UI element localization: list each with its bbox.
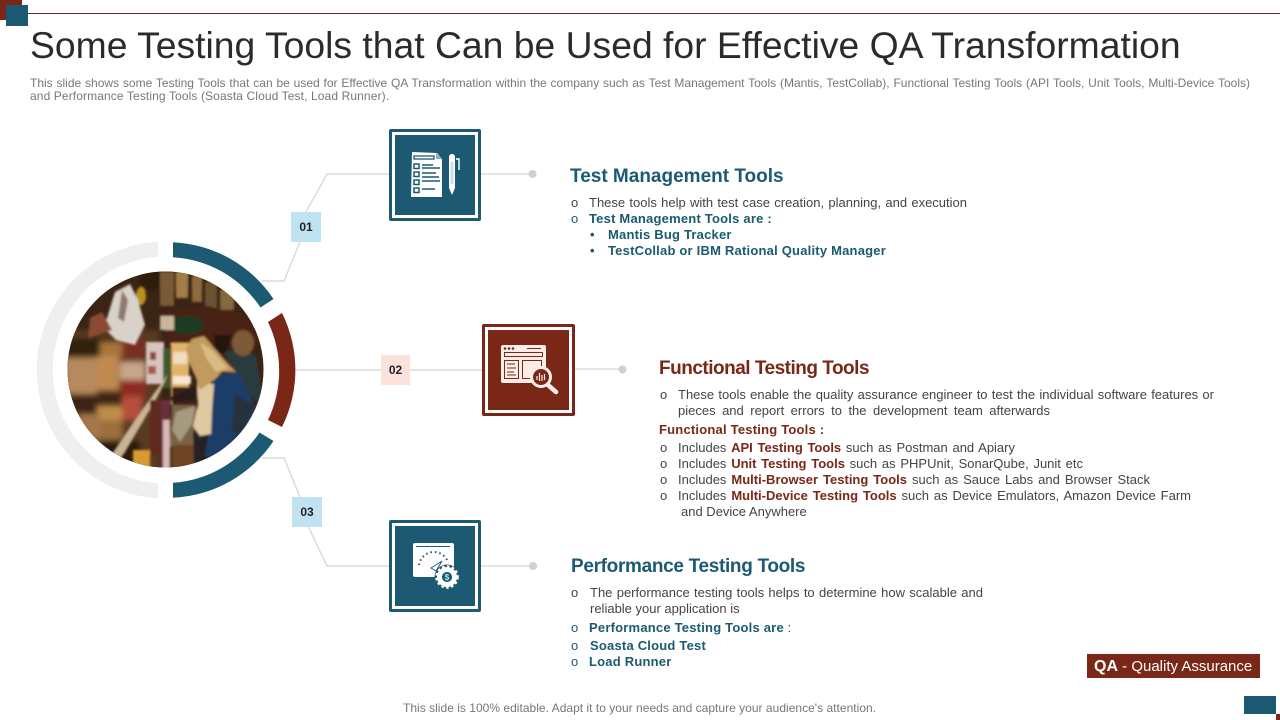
text block: Includes Multi-Device Testing Tools such as Device Emulators, Amazon Device Farm xyxy=(678,488,1191,502)
heading: Functional Testing Tools xyxy=(659,358,869,379)
ring segment: red xyxy=(268,313,295,427)
text block: Load Runner xyxy=(589,654,671,668)
icon box: test management xyxy=(389,129,481,221)
blouse xyxy=(193,380,214,436)
badge 03: 03 xyxy=(300,505,314,519)
text block: pieces and report errors to the development team afterwards xyxy=(678,402,1050,418)
icon box: performance testing xyxy=(389,520,481,612)
text block: and Device Anywhere xyxy=(681,504,807,518)
subtitle description xyxy=(30,76,1250,103)
section: functional testing tools xyxy=(659,358,1214,518)
jacket xyxy=(205,372,256,462)
ring segment: grey xyxy=(37,242,158,498)
shelf edge xyxy=(112,374,168,458)
text block: Test Management Tools are : xyxy=(589,210,772,226)
merchandise column xyxy=(146,342,164,384)
badge 03 xyxy=(292,497,322,527)
text block: o xyxy=(660,488,667,502)
text block: o xyxy=(660,440,667,454)
text block: These tools help with test case creation, planning, and execution xyxy=(589,194,967,210)
top corner accent xyxy=(0,0,28,26)
bottom corner accent xyxy=(1244,696,1280,720)
abbreviation callout xyxy=(1087,654,1260,678)
segmented ring and photo xyxy=(36,242,296,498)
text block: o xyxy=(571,654,578,668)
heading: Performance Testing Tools xyxy=(571,556,805,577)
subtitle description: and Performance Testing Tools (Soasta Cloud Test, Load Runner). xyxy=(30,89,389,103)
text block: o xyxy=(571,584,578,600)
icon box: performance testing: $ xyxy=(445,573,450,582)
text block xyxy=(571,194,967,258)
person behind xyxy=(224,349,262,402)
text block: o xyxy=(571,210,578,226)
text block: The performance testing tools helps to determine how scalable and xyxy=(590,584,983,600)
text block: Functional Testing Tools : xyxy=(659,422,824,436)
pants xyxy=(192,430,209,464)
text block: o xyxy=(571,620,578,634)
text block: o xyxy=(571,638,578,652)
hair xyxy=(186,336,236,390)
icon box: functional testing xyxy=(482,324,575,416)
text block: Performance Testing Tools are : xyxy=(589,620,791,634)
lit doorway xyxy=(171,343,189,405)
heading: Test Management Tools xyxy=(570,166,784,187)
text block: These tools enable the quality assurance engineer to test the individual software features or xyxy=(678,386,1214,402)
text block: o xyxy=(660,456,667,470)
text block: Soasta Cloud Test xyxy=(590,638,706,652)
section: performance testing tools xyxy=(571,556,983,668)
ring segment: bottom teal xyxy=(173,432,274,498)
abbreviation callout: QA - Quality Assurance xyxy=(1094,658,1252,675)
subtitle description: This slide shows some Testing Tools that can be used for Effective QA Transformation within the company such as Test Management Tools (Mantis, TestCollab), Functional Testing Tools (API Tools, Unit Tools, Multi-Device Tools) xyxy=(30,76,1250,90)
top hanging goods xyxy=(138,272,224,291)
badge 02: 02 xyxy=(389,363,402,377)
text block xyxy=(659,386,1214,518)
text block: Includes Unit Testing Tools such as PHPUnit, SonarQube, Junit etc xyxy=(678,456,1083,470)
text block: o xyxy=(571,194,578,210)
photo: shopper in a store xyxy=(68,272,264,468)
badge 01: 01 xyxy=(299,220,313,234)
footer note: This slide is 100% editable. Adapt it to your needs and capture your audience's attention. xyxy=(403,701,876,715)
ring segment: top teal xyxy=(173,242,274,308)
badge 02 xyxy=(381,355,410,385)
badge 01 xyxy=(291,212,321,242)
title: Some Testing Tools that Can be Used for Effective QA Transformation xyxy=(30,24,1181,66)
arm and hand xyxy=(170,386,200,402)
section: test management tools xyxy=(570,166,967,258)
text block: o xyxy=(660,386,667,402)
text block: o xyxy=(660,472,667,486)
text block: • xyxy=(590,242,595,258)
text block xyxy=(571,584,983,668)
text block: reliable your application is xyxy=(590,600,740,616)
text block: Includes API Testing Tools such as Postman and Apiary xyxy=(678,440,1015,454)
text block: Mantis Bug Tracker xyxy=(608,226,732,242)
text block: • xyxy=(590,226,595,242)
text block: Includes Multi-Browser Testing Tools such as Sauce Labs and Browser Stack xyxy=(678,472,1150,486)
text block: TestCollab or IBM Rational Quality Manager xyxy=(608,242,886,258)
